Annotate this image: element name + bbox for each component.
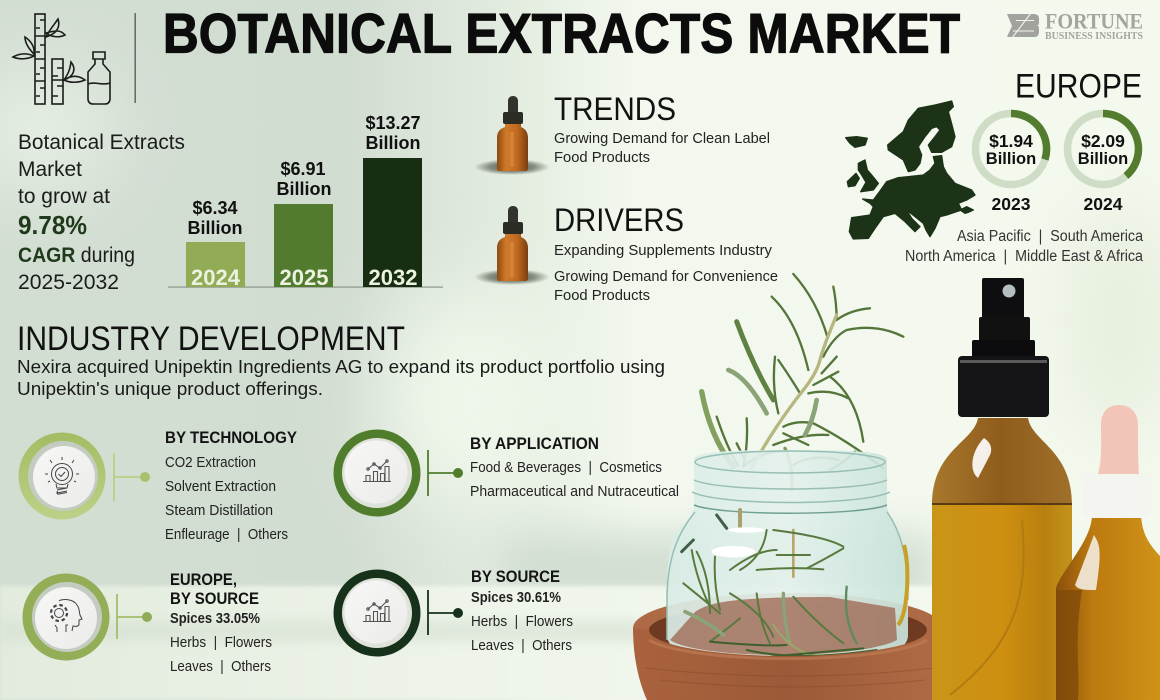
bar 2032: Billion	[366, 133, 420, 153]
heading: INDUSTRY DEVELOPMENT	[17, 320, 405, 358]
bar 2024: $6.34	[192, 198, 238, 218]
text: BY APPLICATION	[470, 434, 599, 453]
text: BY SOURCE	[471, 567, 560, 586]
bar chart	[168, 113, 443, 290]
industry development: Unipektin's unique product offerings.	[17, 379, 323, 399]
trends text	[554, 91, 770, 166]
trends text: Food Products	[554, 150, 650, 166]
text: BY SOURCE	[170, 589, 259, 608]
donut 2024: $2.09	[1081, 131, 1125, 151]
text: Spices 33.05%	[170, 611, 260, 627]
bar 2024: Billion	[188, 218, 242, 238]
donut 2024: 2024	[1084, 194, 1123, 214]
donut 2023: $1.94	[989, 131, 1033, 151]
text: Leaves | Others	[170, 659, 271, 675]
text: Enfleurage | Others	[165, 527, 288, 543]
text	[470, 434, 679, 500]
bar 2032	[363, 113, 422, 290]
connector	[428, 450, 458, 496]
donut 2023: Billion	[986, 150, 1036, 168]
title: BOTANICAL EXTRACTS MARKET	[163, 3, 960, 65]
bar 2025: $6.91	[280, 159, 326, 179]
drivers text: Food Products	[554, 288, 650, 304]
bar 2032: 2032	[369, 265, 417, 290]
text: BY TECHNOLOGY	[165, 428, 298, 447]
drivers text: Growing Demand for Convenience	[554, 269, 778, 285]
bar 2024	[186, 198, 245, 290]
liquid and glass	[932, 418, 1072, 505]
text: CO2 Extraction	[165, 455, 256, 471]
segment: by technology	[18, 428, 298, 543]
text: Solvent Extraction	[165, 479, 276, 495]
donut 2023	[976, 113, 1047, 214]
panel: market growth text: to grow at	[18, 185, 110, 208]
photo: rosemary sprigs top	[702, 274, 903, 490]
photo: dropper bottle	[1056, 405, 1160, 700]
segment: by application	[334, 430, 679, 516]
donut 2024: Billion	[1078, 150, 1128, 168]
photo: wooden bowl front	[633, 628, 943, 700]
bar 2025: 2025	[280, 265, 328, 290]
ring icon: gear head	[22, 574, 110, 660]
ring icon: chart	[334, 570, 420, 656]
other regions: North America | Middle East & Africa	[905, 248, 1143, 265]
drivers text: DRIVERS	[554, 202, 684, 238]
logo	[1007, 8, 1143, 42]
logo: BUSINESS INSIGHTS	[1045, 31, 1143, 42]
bar 2025: Billion	[276, 179, 332, 199]
panel: market growth text: CAGR during	[18, 244, 135, 267]
panel: market growth text: Market	[18, 158, 82, 181]
text: Spices 30.61%	[471, 590, 561, 606]
ring icon: chart	[334, 430, 420, 516]
logo text: FORTUNE	[1045, 8, 1143, 34]
CAGR value: 9.78%	[18, 210, 87, 240]
panel: market growth text	[18, 131, 185, 294]
text	[165, 428, 298, 543]
other regions	[905, 228, 1143, 265]
connector	[428, 590, 458, 635]
rosemary inside jar	[682, 510, 877, 657]
ring icon: light bulb	[18, 432, 106, 520]
drivers text	[554, 202, 778, 304]
photo: wooden bowl back	[633, 593, 943, 663]
rubber bulb	[1098, 405, 1139, 474]
heading: europe: EUROPE	[1015, 68, 1142, 106]
segment: europe by source	[22, 570, 272, 675]
text: EUROPE,	[170, 570, 237, 589]
connector	[117, 594, 147, 639]
other regions: Asia Pacific | South America	[957, 228, 1143, 245]
connector	[114, 453, 145, 501]
icon: dropper bottle drivers	[474, 206, 550, 285]
bar 2025	[274, 159, 333, 290]
text: Pharmaceutical and Nutraceutical	[470, 484, 679, 500]
bar 2024: 2024	[191, 265, 241, 290]
photo: glass jar	[667, 450, 908, 660]
donut 2024	[1068, 114, 1138, 214]
panel: market growth text: Botanical Extracts	[18, 131, 185, 154]
text: Food & Beverages | Cosmetics	[470, 460, 662, 476]
glass	[1056, 515, 1160, 700]
panel: market growth text: 2025-2032	[18, 271, 119, 294]
drivers text: Expanding Supplements Industry	[554, 243, 773, 259]
trends text: Growing Demand for Clean Label	[554, 131, 770, 147]
text: Steam Distillation	[165, 503, 273, 519]
text	[170, 570, 272, 675]
logo mark	[1007, 13, 1039, 38]
text: Leaves | Others	[471, 638, 572, 654]
text: Herbs | Flowers	[170, 635, 272, 651]
map: europe	[846, 101, 975, 239]
industry development	[17, 320, 665, 399]
bar 2032: $13.27	[365, 113, 421, 133]
trends text: TRENDS	[554, 91, 676, 127]
text: Herbs | Flowers	[471, 614, 573, 630]
divider	[134, 13, 136, 103]
spray head	[982, 278, 1024, 322]
collar	[1082, 474, 1151, 518]
donut 2023: 2023	[992, 194, 1031, 214]
text	[471, 567, 573, 654]
photo: spray bottle	[932, 278, 1072, 700]
icon: dropper bottle trends	[474, 96, 550, 175]
icon: bamboo and bottle	[13, 14, 110, 104]
segment: by source	[334, 567, 573, 656]
description: Nexira acquired Unipektin Ingredients AG to expand its product portfolio using	[17, 357, 665, 377]
